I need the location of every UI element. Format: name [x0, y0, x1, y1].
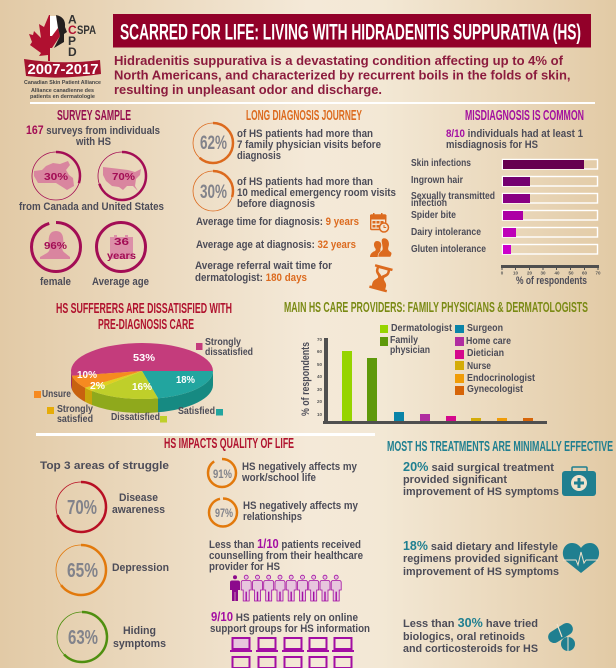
bar chart: care providers [300, 337, 547, 424]
text: 1/10 counselling: counselling from their healthcare [209, 550, 363, 562]
text: emergency room visits: before diagnosis [237, 198, 315, 210]
icon: people [370, 238, 392, 257]
text: biologics [403, 616, 538, 655]
legend: strongly dissatisfied [196, 337, 253, 358]
logo: ACSPA APCD 2007-2017: patients en dermatologie [30, 94, 95, 100]
text: dietary and lifestyle: improvement of HS symptoms [403, 566, 559, 578]
logo: ACSPA APCD 2007-2017: SPA [77, 23, 96, 37]
chart legend: Gynecologist [467, 384, 524, 395]
ring: United States 70% [98, 152, 146, 200]
bar chart: care providers: 30 [317, 387, 322, 392]
pie chart: 16% [132, 381, 153, 393]
bar chart: care providers: 10 [317, 412, 322, 417]
bar chart: misdiagnoses: 60 [582, 270, 587, 276]
label: disease awareness: awareness [112, 504, 165, 516]
subheading: top 3 areas: Top 3 areas of struggle [40, 460, 169, 472]
bar chart: misdiagnoses: 0 [501, 270, 504, 276]
panel: treatments minimally effective [387, 439, 613, 655]
survey count text: with HS [75, 136, 111, 148]
ring: work/school 91% [208, 459, 236, 487]
ring: relationships 97% [209, 498, 237, 526]
pie chart: 2% [90, 380, 106, 392]
text: emergency room visits [237, 176, 396, 210]
survey count text [26, 123, 160, 148]
text: work/school life [241, 461, 358, 484]
legend: strongly satisfied: Strongly [57, 404, 93, 415]
bar chart: care providers: 40 [317, 374, 322, 379]
ring: average age 36 years: 36 [114, 236, 129, 248]
text: family physician visits: of HS patients had more than [237, 128, 373, 140]
icon grid: laptops [230, 638, 354, 668]
legend: strongly satisfied [47, 404, 93, 425]
text: 9/10 online groups: 9/10 HS patients rely on online [211, 610, 358, 624]
icon: pills [546, 621, 575, 651]
logo: ACSPA APCD 2007-2017 [24, 12, 101, 100]
icon: heart with pulse [563, 543, 599, 573]
heading: long diagnosis journey: LONG DIAGNOSIS JOURNEY [246, 108, 362, 124]
bar chart: misdiagnoses: 30 [540, 270, 546, 276]
text: 8/10 misdiagnosed: misdiagnosis for HS [446, 139, 538, 151]
intro text: resulting in unpleasant odor and discharge. [114, 82, 382, 97]
text: average time for diagnosis: Average time for diagnosis: 9 years [196, 216, 359, 228]
text: referral wait time: Average referral wait time for [195, 260, 333, 272]
logo: ACSPA APCD 2007-2017: C [68, 23, 77, 37]
heading: impacts quality of life: HS IMPACTS QUALITY OF LIFE [164, 436, 294, 452]
bar chart: care providers: % of respondents [300, 342, 312, 416]
bar chart: misdiagnoses: Dairy intolerance [411, 227, 481, 238]
text: dietary and lifestyle [403, 539, 559, 578]
heading: dissatisfied with pre-diagnosis care: HS SUFFERERS ARE DISSATISFIED WITH [56, 301, 232, 317]
text: referral wait time [195, 260, 333, 284]
heading: dissatisfied with pre-diagnosis care [56, 301, 232, 333]
icon row: 1 of 10 people [230, 575, 341, 601]
ring: 62% [193, 123, 233, 163]
text: referral wait time: dermatologist: 180 days [195, 272, 307, 284]
ring: 30%: 30% [200, 182, 227, 203]
icon: calendar [370, 213, 388, 232]
ring: hiding symptoms 63%: 63% [68, 627, 98, 649]
pie chart: 18% [176, 374, 196, 386]
logo: ACSPA APCD 2007-2017: Canadian Skin Patient Alliance [24, 80, 101, 86]
label: female: female [40, 276, 71, 288]
ring: hiding symptoms 63% [57, 612, 107, 662]
label: disease awareness: Disease [119, 492, 158, 504]
logo: ACSPA APCD 2007-2017: 2007-2017 [28, 61, 98, 78]
chart legend [380, 323, 536, 395]
bar chart: care providers: 50 [317, 362, 322, 367]
text: 8/10 misdiagnosed: 8/10 individuals had at least 1 [446, 128, 583, 140]
label: depression: Depression [112, 562, 169, 574]
icon: medical kit [562, 467, 596, 496]
ring: female 96%: 96% [44, 240, 68, 252]
ring: female 96% [32, 222, 80, 272]
text: biologics: Less than 30% have tried [403, 616, 538, 630]
logo: ACSPA APCD 2007-2017: A [68, 12, 77, 26]
chart legend: Home care [466, 336, 511, 347]
ring: disease awareness 70% [56, 482, 106, 532]
text: family physician visits: diagnosis [237, 150, 281, 162]
bar chart: misdiagnoses: infection [411, 198, 447, 209]
text: relationships: HS negatively affects my [243, 500, 359, 512]
bar chart: care providers: 70 [317, 337, 322, 342]
text: 9/10 online groups: support groups for HS information [210, 623, 370, 635]
label: hiding symptoms: symptoms [113, 638, 166, 650]
legend: strongly satisfied: satisfied [57, 414, 93, 425]
bar chart: misdiagnoses: Spider bite [411, 210, 456, 221]
ring: disease awareness 70%: 70% [67, 497, 97, 519]
panel: misdiagnosis is common [411, 108, 601, 287]
bar chart: care providers: 20 [317, 399, 322, 404]
legend: satisfied: Satisfied [178, 406, 215, 417]
chart legend: Dietician [467, 348, 504, 359]
heading: dissatisfied with pre-diagnosis care: PRE-DIAGNOSIS CARE [98, 317, 194, 333]
bar chart: misdiagnoses: 70 [595, 270, 601, 276]
intro text: North Americans, and characterized by recurrent boils in the folds of skin, [114, 68, 570, 82]
chart legend: Endocrinologist [467, 373, 536, 384]
text: biologics: biologics, oral retinoids [403, 631, 525, 643]
panel: long diagnosis journey [193, 108, 396, 292]
ring: average age 36 years [96, 222, 146, 272]
ring: 30% [193, 171, 233, 211]
bar chart: misdiagnoses: Ingrown hair [411, 175, 463, 186]
bar chart: misdiagnoses: Skin infections [411, 158, 471, 169]
intro text: Hidradenitis suppurativa is a devastating condition affecting up to 4% of [114, 53, 564, 68]
label: hiding symptoms: Hiding [123, 625, 156, 637]
bar chart: misdiagnoses: Gluten intolerance [411, 244, 486, 255]
text: 8/10 misdiagnosed [446, 128, 583, 151]
chart legend: Nurse [467, 361, 491, 372]
logo: ACSPA APCD 2007-2017: P [68, 34, 76, 48]
ring: 62%: 62% [200, 133, 227, 154]
ring: work/school 91%: 91% [213, 467, 232, 481]
ring: average age 36 years: years [107, 250, 136, 262]
legend: strongly dissatisfied: dissatisfied [205, 347, 253, 358]
logo: ACSPA APCD 2007-2017: Alliance canadienne des [31, 88, 94, 94]
ring: depression 65% [56, 545, 106, 595]
heading: survey sample: SURVEY SAMPLE [57, 108, 131, 124]
bar chart: misdiagnoses: 20 [527, 270, 532, 276]
bar chart: misdiagnoses: % of respondents [516, 275, 587, 287]
text: family physician visits: 7 family physician visits before [237, 139, 381, 151]
pie chart: 10% [77, 369, 98, 381]
text: average age at diagnosis: Average age at diagnosis: 32 years [196, 239, 356, 251]
chart legend: Surgeon [467, 323, 503, 334]
ring: Canada 30%: 30% [44, 171, 69, 183]
text: surgical treatment [403, 460, 559, 498]
chart legend: Dermatologist [391, 323, 453, 334]
bar chart: misdiagnoses: 50 [568, 270, 574, 276]
text: 9/10 online groups [210, 610, 370, 635]
ring: United States 70%: 70% [112, 171, 136, 183]
bar chart: misdiagnoses: 10 [513, 270, 518, 276]
bar chart: misdiagnoses: 40 [554, 270, 560, 276]
legend: dissatisfied: Dissatisfied [111, 412, 160, 423]
pie chart [71, 343, 213, 413]
text: work/school life: work/school life [241, 472, 316, 484]
chart legend: physician [390, 345, 430, 356]
text: work/school life: HS negatively affects my [242, 461, 358, 473]
text: 1/10 counselling [209, 537, 363, 573]
pie chart: 53% [133, 352, 156, 364]
icon: hourglass [369, 264, 393, 292]
bar chart: misdiagnoses: Sexually transmitted [411, 191, 495, 202]
panel: HS impacts quality of life [40, 436, 370, 668]
text: family physician visits [237, 128, 381, 162]
ring: Canada 30% [32, 152, 80, 200]
ring: relationships 97%: 97% [215, 506, 233, 520]
text: relationships [243, 500, 359, 523]
text: surgical treatment: provided significant [403, 474, 507, 486]
panel: survey sample [19, 108, 164, 288]
text: dietary and lifestyle: regimens provided significant [403, 553, 558, 565]
intro text [114, 53, 570, 97]
text: biologics: and corticosteroids for HS [403, 643, 538, 655]
text: emergency room visits: of HS patients had more than [237, 176, 373, 188]
text: emergency room visits: 10 medical emergency room visits [237, 187, 396, 199]
label: disease awareness [112, 492, 165, 516]
text: 1/10 counselling: provider for HS [209, 561, 280, 573]
ring: depression 65%: 65% [67, 560, 98, 582]
text: 1/10 counselling: Less than 1/10 patients received [209, 537, 361, 551]
legend: strongly dissatisfied: Strongly [205, 337, 241, 348]
legend: unsure: Unsure [42, 389, 71, 400]
text: dietary and lifestyle: 18% said dietary and lifestyle [403, 539, 558, 553]
country label: from Canada and United States [19, 201, 164, 213]
panel: pre-diagnosis care pie [34, 301, 253, 425]
bar chart: care providers: 60 [317, 349, 322, 354]
survey count text: 167 surveys from individuals [26, 123, 160, 137]
bar chart: misdiagnoses [411, 158, 601, 287]
logo: ACSPA APCD 2007-2017: D [68, 45, 77, 59]
label: hiding symptoms [113, 625, 166, 650]
text: surgical treatment: improvement of HS symptoms [403, 486, 559, 498]
label: average age: Average age [92, 276, 149, 288]
text: surgical treatment: 20% said surgical treatment [403, 460, 554, 474]
text: relationships: relationships [243, 511, 302, 523]
panel: main HS care providers [284, 300, 588, 424]
chart legend: Family [390, 335, 418, 346]
